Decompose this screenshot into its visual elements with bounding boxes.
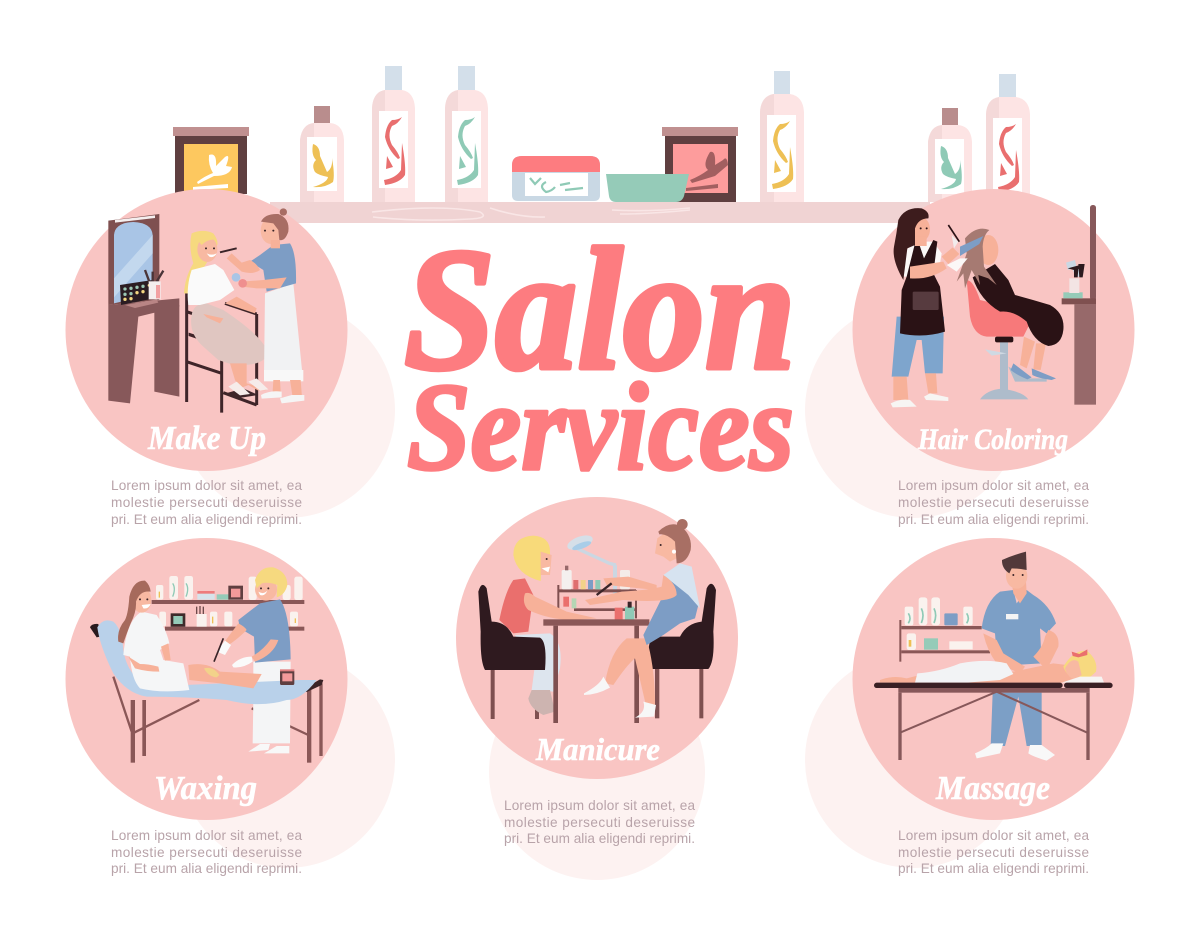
panel: top shelf with products: [173, 66, 1030, 223]
text: massage description: pri. Et eum alia eligendi reprimi.: [898, 861, 1089, 876]
title: Salon: [404, 212, 796, 406]
label: massage: Massage: [935, 770, 1050, 807]
text: waxing description: pri. Et eum alia eligendi reprimi.: [111, 861, 302, 876]
text: massage description: molestie persecuti deseruisse: [898, 845, 1089, 860]
client: [1020, 337, 1046, 370]
text: hair coloring description: pri. Et eum alia eligendi reprimi.: [898, 512, 1089, 527]
text: manicure description: molestie persecuti deseruisse: [504, 815, 695, 830]
illustration: massage scene: [874, 552, 1113, 761]
chair: [967, 280, 1030, 337]
stylist: [892, 317, 944, 377]
illustration: make up scene: [108, 208, 304, 413]
text: massage description: Lorem ipsum dolor sit amet, ea: [898, 828, 1089, 843]
bottle: small yellow: [300, 106, 344, 202]
text: hair coloring description: Lorem ipsum dolor sit amet, ea: [898, 478, 1089, 493]
text: manicure description: [504, 798, 695, 846]
panel: hair coloring: [852, 189, 1134, 527]
text: massage description: [898, 828, 1089, 876]
text: make up description: pri. Et eum alia eligendi reprimi.: [111, 512, 302, 527]
panel: waxing: [66, 538, 348, 876]
bottle: small green: [928, 108, 972, 202]
panel: make up: [66, 189, 348, 527]
jar: red: [662, 127, 738, 202]
title: Services: [407, 359, 794, 497]
illustration: manicure scene: [478, 519, 716, 723]
bottle: tall yellow: [760, 71, 804, 202]
text: manicure description: Lorem ipsum dolor sit amet, ea: [504, 798, 695, 813]
illustration: hair coloring scene: [891, 205, 1096, 407]
panel: manicure: [456, 497, 738, 846]
bowl: green: [606, 174, 689, 202]
bottle: tall red: [372, 66, 415, 202]
jar: yellow: [173, 127, 249, 194]
text: waxing description: [111, 828, 302, 876]
jar: cream: [512, 156, 600, 201]
label: waxing: Waxing: [154, 770, 257, 807]
text: make up description: [111, 478, 302, 527]
title: [404, 212, 796, 497]
text: manicure description: pri. Et eum alia eligendi reprimi.: [504, 831, 695, 846]
bottle: tall green: [445, 66, 488, 202]
bottle: tall red right: [986, 74, 1030, 202]
text: waxing description: Lorem ipsum dolor sit amet, ea: [111, 828, 302, 843]
panel: massage: [852, 538, 1134, 876]
text: make up description: molestie persecuti deseruisse: [111, 495, 302, 510]
label: make up: Make Up: [147, 420, 266, 457]
text: hair coloring description: molestie persecuti deseruisse: [898, 495, 1089, 510]
panel: background soft circles: [179, 302, 1021, 880]
label: manicure: Manicure: [535, 731, 660, 767]
text: make up description: Lorem ipsum dolor sit amet, ea: [111, 478, 302, 493]
label: hair coloring: Hair Coloring: [917, 423, 1068, 456]
text: hair coloring description: [898, 478, 1089, 527]
illustration: waxing scene: [90, 567, 323, 763]
text: waxing description: molestie persecuti deseruisse: [111, 845, 302, 860]
